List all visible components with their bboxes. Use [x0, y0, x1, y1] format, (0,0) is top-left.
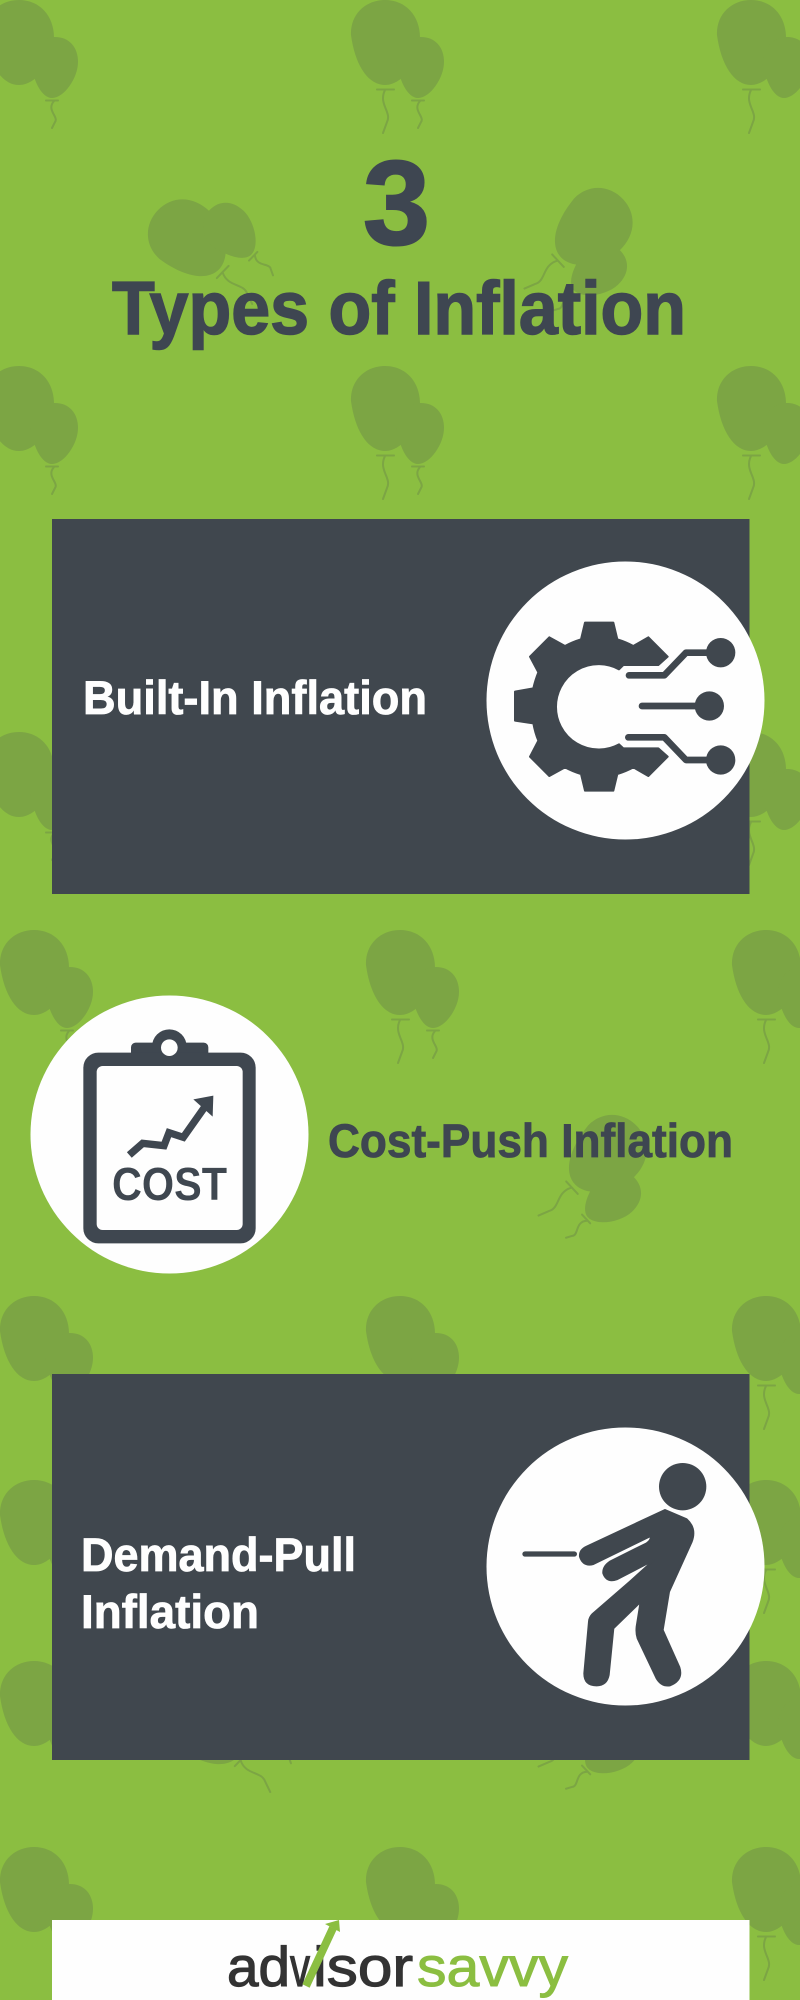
icon: gear with circuit traces: [486, 562, 764, 840]
heading: built-in inflation: Built-In Inflation: [83, 671, 427, 724]
logo: advisorsavvy: savvy: [417, 1935, 568, 1998]
title: [112, 136, 686, 350]
panel: demand-pull inflation: [52, 1374, 764, 1760]
heading: demand-pull inflation: Demand-Pull: [81, 1528, 356, 1581]
title: Types of Inflation: [112, 266, 686, 350]
title: 3: [363, 136, 430, 270]
logo: advisorsavvy: ad: [227, 1935, 290, 1998]
icon: clipboard with rising cost chart: [30, 996, 308, 1274]
panel: built-in inflation: [52, 519, 764, 894]
logo: advisorsavvy: [227, 1920, 568, 1998]
logo: advisorsavvy: isor: [313, 1935, 413, 1998]
icon: clipboard with rising cost chart: COST: [112, 1158, 227, 1210]
icon: person pulling rope: [486, 1428, 764, 1706]
logo panel: [52, 1920, 750, 2000]
logo: advisorsavvy: v: [290, 1935, 310, 1998]
heading: demand-pull inflation: Inflation: [81, 1585, 259, 1638]
heading: cost-push inflation: Cost-Push Inflation: [328, 1114, 733, 1167]
heading: demand-pull inflation: [81, 1528, 356, 1638]
